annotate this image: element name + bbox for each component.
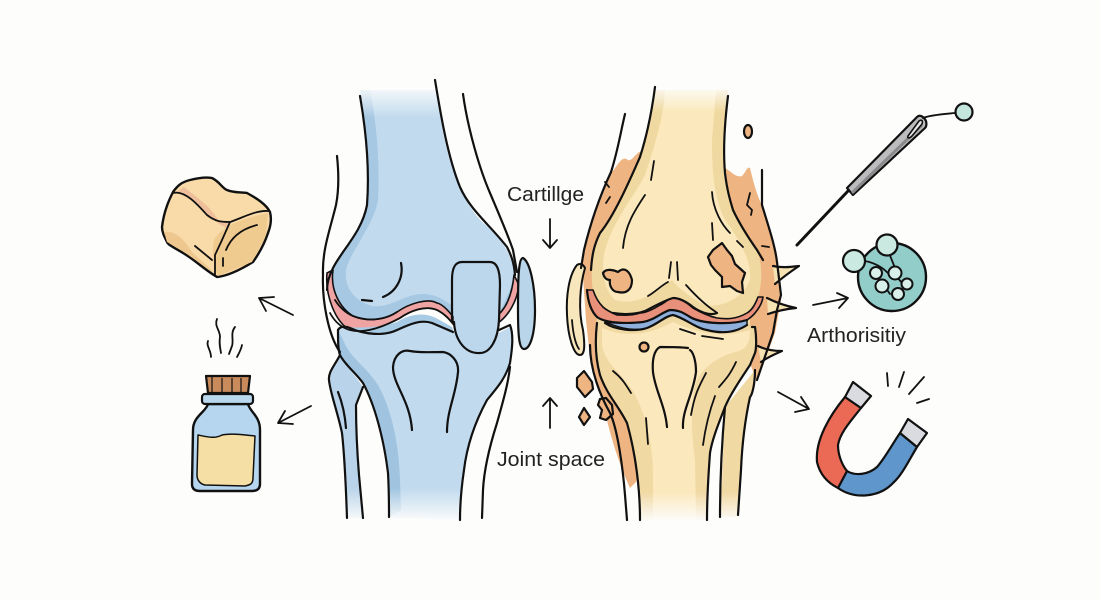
arrow: to magnet <box>778 392 809 412</box>
small cyst <box>640 342 648 352</box>
cartilage band: arthritic <box>587 290 763 323</box>
joint backing <box>600 305 750 332</box>
lesion: right condyle <box>708 243 745 293</box>
label: Arthorisitiy: Arthorisitiy <box>807 325 906 347</box>
bone spur growth: left <box>582 151 650 488</box>
arrow: down to joint <box>543 219 557 248</box>
meniscus: arthritic <box>605 310 747 332</box>
label: Joint space: Joint space <box>497 449 605 471</box>
femur: arthritic <box>592 90 761 318</box>
cartilage band: healthy <box>327 270 519 331</box>
arrow: up from joint space <box>543 398 557 428</box>
arthritic knee <box>567 84 799 522</box>
jar cork <box>206 376 250 393</box>
knee outlines: healthy <box>323 80 517 520</box>
icon: molecule cluster <box>843 234 926 311</box>
arrow: to cartilage chunk <box>259 297 293 315</box>
icon: horseshoe magnet <box>817 372 929 495</box>
fibula: healthy <box>329 355 363 518</box>
meniscus bursa: arthritic <box>567 264 585 355</box>
bone spurs <box>758 266 799 362</box>
lesion: left condyle <box>603 270 632 292</box>
icon: jar of synovial fluid <box>192 376 260 491</box>
magnet red arm <box>817 397 861 488</box>
arrow: to molecule <box>813 293 848 308</box>
bone fragments <box>577 125 752 425</box>
fade overlays <box>350 84 450 118</box>
jar fluid <box>197 434 255 486</box>
icon: cartilage chunk <box>162 178 271 277</box>
femur: healthy <box>331 90 515 322</box>
knee outlines: arthritic <box>572 87 781 520</box>
arrow: to jar <box>278 406 311 424</box>
jar body <box>192 404 260 491</box>
bursa: healthy <box>518 258 535 349</box>
jar neck ring <box>202 394 253 404</box>
bone spur growth: right <box>725 168 781 382</box>
magnet blue arm <box>838 433 917 495</box>
icon: syringe needle <box>797 104 972 245</box>
tibia: healthy <box>338 315 512 520</box>
magnet caps <box>845 382 871 408</box>
tibia: arthritic <box>596 313 756 520</box>
icon: steam <box>208 319 242 357</box>
patella: healthy <box>452 262 500 353</box>
healthy knee <box>323 80 535 522</box>
label: Cartilage: Cartillge <box>507 184 584 206</box>
fade overlays <box>645 84 735 112</box>
